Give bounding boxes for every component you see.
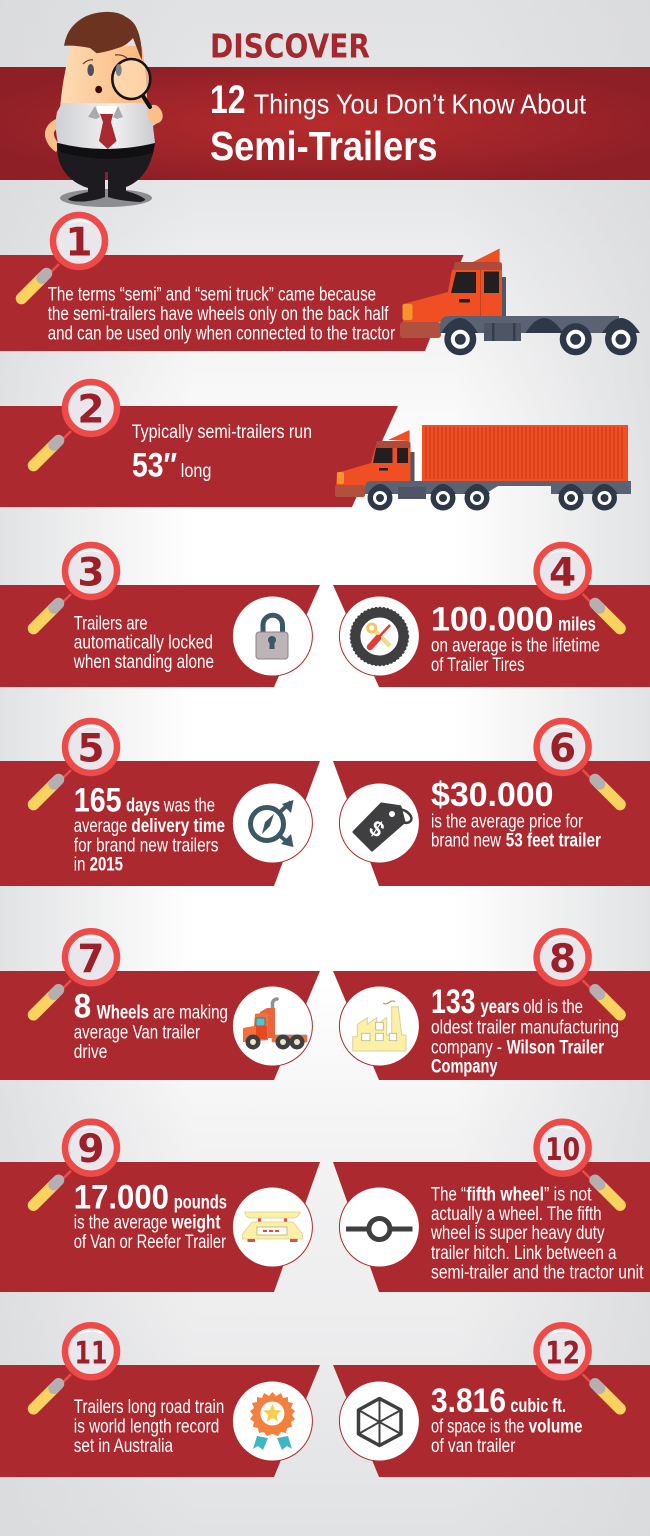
text: fact 12 bbox=[431, 1382, 582, 1457]
text: fact 7 bbox=[74, 988, 228, 1063]
text: fact 2 bbox=[132, 422, 312, 485]
text: fact 7: drive bbox=[74, 1042, 107, 1063]
magnifier 10: 10 bbox=[545, 1132, 580, 1168]
magnifier 12 bbox=[537, 1325, 620, 1409]
magnifier 5 bbox=[34, 721, 117, 804]
icon: award rosette bbox=[232, 1381, 312, 1461]
text: fact 8 bbox=[431, 983, 619, 1078]
text: fact 4 bbox=[431, 601, 600, 676]
text: fact 10: The “ bbox=[431, 1184, 466, 1205]
text: fact 3: automatically locked bbox=[74, 633, 213, 654]
magnifier 1: 1 bbox=[65, 220, 93, 266]
panel: fact 7 bbox=[0, 971, 320, 1080]
text: fact 8: company - bbox=[431, 1037, 502, 1058]
heading: 12: 12 bbox=[210, 78, 246, 122]
text: fact 1 bbox=[48, 285, 396, 344]
text: fact 7: 8 bbox=[74, 988, 91, 1026]
panel: fact 5 bbox=[0, 761, 320, 886]
heading: discover: DISCOVER bbox=[210, 26, 370, 66]
text: fact 5: for brand new trailers bbox=[74, 836, 218, 857]
text: fact 4: of Trailer Tires bbox=[431, 655, 524, 676]
text: fact 2: 53″ bbox=[132, 447, 177, 485]
text: fact 7: average Van trailer bbox=[74, 1023, 201, 1044]
panel: fact 1 bbox=[0, 255, 464, 351]
magnifier 12: 12 bbox=[545, 1336, 580, 1372]
text: fact 5: days bbox=[126, 796, 160, 817]
icon: compass with arrows bbox=[232, 783, 312, 863]
text: fact 7: Wheels bbox=[97, 1002, 149, 1024]
magnifier 5: 5 bbox=[77, 726, 105, 772]
text: fact 12: volume bbox=[529, 1417, 582, 1438]
text: fact 4: miles bbox=[558, 615, 596, 636]
icon: tire and tools bbox=[339, 596, 419, 676]
text: fact 5: in bbox=[74, 855, 85, 876]
magnifier 7 bbox=[34, 931, 117, 1015]
text: fact 7: are making bbox=[153, 1002, 228, 1024]
text: fact 8: 133 bbox=[431, 983, 476, 1021]
icon: price tag bbox=[339, 783, 419, 863]
magnifier 2 bbox=[34, 382, 117, 466]
text: fact 10: fifth wheel bbox=[466, 1184, 544, 1205]
magnifier 7: 7 bbox=[77, 937, 105, 982]
text: fact 6: brand new bbox=[431, 831, 501, 852]
text: fact 9: of Van or Reefer Trailer bbox=[74, 1232, 227, 1253]
magnifier 1 bbox=[22, 215, 105, 298]
text: fact 9: 17.000 bbox=[74, 1178, 169, 1216]
text: fact 6: is the average price for bbox=[431, 811, 584, 832]
text: fact 5: 2015 bbox=[90, 855, 123, 876]
text: fact 3 bbox=[73, 613, 214, 673]
magnifier 11: 11 bbox=[74, 1336, 108, 1372]
text: fact 1: and can be used only when connected to the tractor bbox=[48, 323, 396, 344]
text: fact 12: 3.816 bbox=[431, 1382, 506, 1420]
panel: fact 11 bbox=[0, 1365, 320, 1477]
text: fact 10: wheel is super heavy duty bbox=[430, 1223, 605, 1244]
text: fact 3: when standing alone bbox=[73, 652, 214, 673]
text: fact 5: 165 bbox=[74, 782, 122, 820]
panel: fact 10 bbox=[333, 1162, 650, 1292]
icon: truck with trailer bbox=[335, 425, 631, 510]
text: fact 12: cubic ft. bbox=[510, 1396, 566, 1417]
icon: padlock bbox=[232, 596, 312, 676]
header band bbox=[0, 67, 650, 180]
text: fact 8: Wilson Trailer bbox=[507, 1037, 604, 1058]
magnifier 6 bbox=[537, 721, 620, 804]
icon: cube bbox=[339, 1381, 419, 1461]
text: fact 3: Trailers are bbox=[74, 613, 148, 634]
magnifier 6: 6 bbox=[549, 726, 576, 772]
text: fact 5: delivery time bbox=[131, 816, 225, 837]
text: fact 1: The terms “semi” and “semi truck” came because bbox=[48, 285, 376, 306]
magnifier 9 bbox=[34, 1122, 117, 1205]
text: fact 5: average bbox=[74, 816, 127, 837]
icon: tractor truck bbox=[400, 248, 640, 355]
magnifier 10 bbox=[537, 1122, 620, 1205]
text: fact 12: of space is the bbox=[431, 1417, 524, 1438]
text: fact 9: weight bbox=[171, 1212, 221, 1233]
magnifier 2: 2 bbox=[77, 388, 105, 432]
icon: fifth wheel bbox=[339, 1187, 419, 1267]
text: fact 2: Typically semi-trailers run bbox=[132, 422, 312, 443]
text: fact 1: the semi-trailers have wheels only on the back half bbox=[48, 304, 389, 325]
magnifier 8: 8 bbox=[549, 937, 576, 982]
magnifier 4: 4 bbox=[549, 550, 576, 596]
text: fact 11: Trailers long road train bbox=[74, 1397, 224, 1418]
magnifier 3: 3 bbox=[77, 550, 105, 596]
text: fact 4: 100.000 bbox=[431, 601, 554, 639]
text: fact 9: is the average bbox=[74, 1212, 168, 1233]
panel: fact 12 bbox=[333, 1365, 650, 1477]
character with magnifying glass bbox=[45, 12, 163, 207]
panel: fact 8 bbox=[333, 971, 650, 1080]
text: fact 6 bbox=[431, 776, 601, 852]
text: fact 10: ” is not bbox=[544, 1184, 592, 1205]
magnifier 3 bbox=[34, 545, 117, 628]
panel: fact 2 bbox=[0, 406, 398, 507]
text: fact 6: $30.000 bbox=[431, 776, 554, 814]
heading: things: Things You Don’t Know About bbox=[254, 88, 586, 119]
text: fact 8: Company bbox=[431, 1056, 498, 1078]
title bbox=[210, 26, 586, 169]
panel: fact 6 bbox=[333, 761, 650, 886]
text: fact 8: years bbox=[480, 997, 520, 1018]
panel: fact 9 bbox=[0, 1162, 320, 1292]
text: fact 2: long bbox=[181, 461, 211, 482]
icon: small truck bbox=[232, 986, 312, 1066]
text: fact 9: pounds bbox=[174, 1192, 227, 1213]
magnifier 4 bbox=[537, 545, 620, 628]
text: fact 5: was the bbox=[163, 796, 215, 817]
text: fact 6: 53 feet trailer bbox=[506, 831, 601, 852]
text: fact 4: on average is the lifetime bbox=[431, 636, 600, 657]
text: fact 10: actually a wheel. The fifth bbox=[431, 1204, 602, 1225]
icon: scale bbox=[232, 1187, 312, 1267]
panel: fact 3 bbox=[0, 585, 320, 687]
panel: fact 4 bbox=[333, 585, 650, 687]
magnifier 9: 9 bbox=[77, 1127, 105, 1172]
magnifier 8 bbox=[537, 931, 620, 1015]
text: fact 10 bbox=[430, 1184, 644, 1283]
text: fact 11: is world length record bbox=[74, 1417, 219, 1438]
text: fact 5 bbox=[74, 782, 225, 876]
icon: price tag: $ bbox=[365, 815, 389, 843]
text: fact 11 bbox=[74, 1397, 224, 1457]
magnifier 11 bbox=[34, 1325, 117, 1409]
heading: semi-trailers: Semi-Trailers bbox=[210, 123, 438, 169]
text: fact 12: of van trailer bbox=[431, 1436, 516, 1457]
text: fact 9 bbox=[74, 1178, 227, 1253]
text: fact 8: old is the bbox=[523, 997, 583, 1018]
icon: factory bbox=[339, 986, 419, 1066]
text: fact 11: set in Australia bbox=[74, 1436, 173, 1457]
